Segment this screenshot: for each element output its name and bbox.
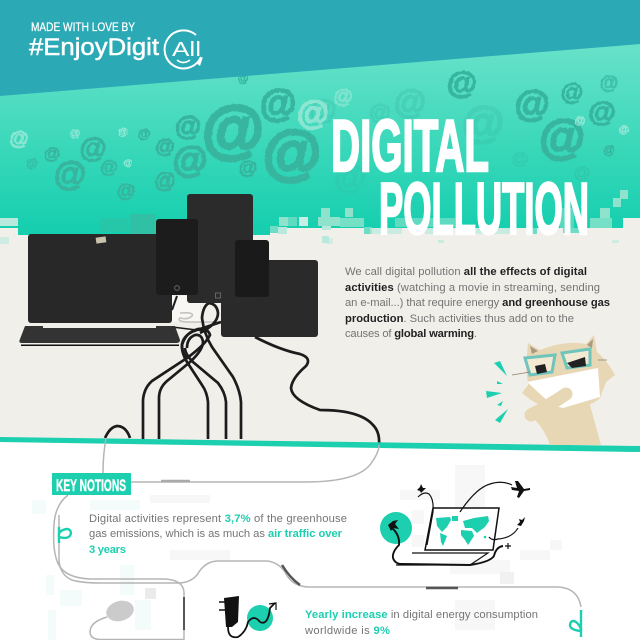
text block: introduction: activities (watching a movie in streaming, sending bbox=[345, 282, 600, 294]
all circle logo bbox=[165, 30, 203, 68]
panel: teal hero background bbox=[0, 44, 640, 230]
keyboard base bbox=[19, 326, 180, 343]
sticker bbox=[96, 236, 106, 244]
icon: mouse bbox=[104, 598, 136, 624]
at-sign pattern: @ bbox=[394, 83, 426, 120]
at-sign pattern: @ bbox=[138, 126, 150, 141]
at-sign pattern: @ bbox=[79, 132, 107, 163]
dark cable segments bbox=[161, 481, 458, 630]
laptop base bbox=[396, 553, 488, 565]
text block: notion one bbox=[89, 513, 347, 556]
at-sign pattern: @ bbox=[117, 181, 135, 202]
at-sign pattern: @ bbox=[588, 96, 616, 127]
at-sign pattern: @ bbox=[539, 110, 585, 163]
at-sign pattern bbox=[9, 65, 630, 202]
at-sign pattern: @ bbox=[603, 143, 615, 157]
plane icons bbox=[388, 481, 530, 549]
at-sign pattern: @ bbox=[512, 149, 528, 168]
at-sign pattern: @ bbox=[514, 83, 550, 124]
at-sign pattern: @ bbox=[202, 93, 264, 165]
cat whiskers bbox=[512, 360, 607, 375]
teal divider line bbox=[0, 437, 640, 452]
at-sign pattern: @ bbox=[309, 94, 337, 125]
at-sign pattern: @ bbox=[334, 158, 366, 195]
header logo bbox=[29, 22, 203, 68]
icon: world laptop with planes bbox=[380, 481, 530, 565]
title: DIGITAL bbox=[331, 106, 489, 187]
at-sign pattern: @ bbox=[154, 168, 176, 193]
icon: charger with rising curve bbox=[219, 596, 276, 637]
cat mask bbox=[527, 368, 600, 408]
at-sign pattern: @ bbox=[54, 155, 86, 192]
at-sign pattern: @ bbox=[574, 163, 590, 182]
hashtag wordmark: #EnjoyDigit bbox=[29, 34, 159, 61]
device: phone right bbox=[235, 240, 269, 297]
title bbox=[331, 106, 589, 250]
at-sign pattern: @ bbox=[297, 94, 329, 131]
panel: header band bbox=[0, 0, 640, 96]
text block: notion two bbox=[304, 609, 538, 637]
at-sign pattern: @ bbox=[100, 157, 118, 177]
all circle logo: All bbox=[172, 39, 201, 61]
device: tablet bbox=[187, 194, 253, 303]
panel: white cable backing behind laptop bbox=[172, 296, 200, 322]
mosaic edge between teal and cream bbox=[0, 190, 628, 244]
at-sign pattern: @ bbox=[9, 128, 29, 150]
cat body bbox=[535, 405, 601, 445]
at-sign pattern: @ bbox=[175, 111, 201, 141]
at-sign pattern: @ bbox=[263, 119, 321, 186]
text block: notion one: 3 years bbox=[89, 544, 126, 556]
cable network on white section bbox=[54, 438, 581, 640]
at-sign pattern: @ bbox=[172, 139, 208, 180]
at-sign pattern: @ bbox=[369, 100, 391, 125]
at-sign pattern: @ bbox=[118, 127, 128, 138]
laptop screen bbox=[425, 508, 499, 550]
icon: sneeze marks bbox=[486, 361, 508, 423]
at-sign pattern: @ bbox=[561, 79, 583, 105]
at-sign pattern: @ bbox=[155, 136, 175, 158]
flight paths bbox=[392, 482, 518, 565]
text block: notion two: Yearly increase in digital energy consumption bbox=[305, 609, 538, 621]
text block: introduction: production. Such activities thus add on to the bbox=[345, 313, 574, 325]
at-sign pattern: @ bbox=[239, 158, 257, 179]
at-sign pattern: @ bbox=[600, 73, 618, 94]
panel: cream section bbox=[0, 218, 640, 452]
text block: introduction: We call digital pollution all the effects of digital bbox=[345, 266, 587, 278]
icon: right knot bbox=[570, 610, 581, 637]
text block: introduction: causes of global warming. bbox=[345, 328, 477, 340]
heading: key notions bbox=[52, 473, 131, 495]
at-sign pattern: @ bbox=[333, 86, 353, 108]
text block: notion two: worldwide is 9% bbox=[304, 625, 390, 637]
at-sign pattern: @ bbox=[44, 144, 60, 163]
text block: introduction bbox=[345, 266, 610, 340]
cat head bbox=[522, 335, 615, 410]
heading: key notions: KEY NOTIONS bbox=[56, 476, 126, 495]
cables to devices bbox=[105, 296, 379, 445]
faint mosaic on white section bbox=[32, 465, 562, 640]
cat glasses bbox=[525, 349, 590, 375]
at-sign pattern: @ bbox=[462, 98, 504, 147]
icon: cat with mask bbox=[512, 335, 615, 445]
at-sign pattern: @ bbox=[575, 115, 586, 127]
text block: notion one: gas emissions, which is as much as air traffic over bbox=[89, 528, 343, 540]
device: laptop bbox=[19, 234, 180, 346]
icon: grey cable squiggle bbox=[179, 313, 221, 322]
at-sign pattern: @ bbox=[447, 65, 477, 100]
text block: introduction: an e-mail...) that require energy and greenhouse gas bbox=[345, 297, 610, 309]
made with love label: MADE WITH LOVE BY bbox=[31, 22, 135, 34]
at-sign pattern: @ bbox=[26, 156, 38, 170]
device: phone left bbox=[156, 219, 198, 295]
icon: left knot bbox=[59, 527, 71, 543]
at-sign pattern: @ bbox=[124, 158, 133, 168]
cat arm and paw bbox=[531, 394, 566, 415]
at-sign pattern: @ bbox=[70, 128, 81, 140]
world map bbox=[436, 516, 489, 546]
at-sign pattern: @ bbox=[259, 83, 297, 125]
text block: notion one: Digital activities represent 3,7% of the greenhouse bbox=[89, 513, 347, 525]
at-sign pattern: @ bbox=[619, 124, 630, 136]
device: dark tablet landscape bbox=[221, 260, 318, 337]
at-sign pattern: @ bbox=[238, 73, 249, 85]
